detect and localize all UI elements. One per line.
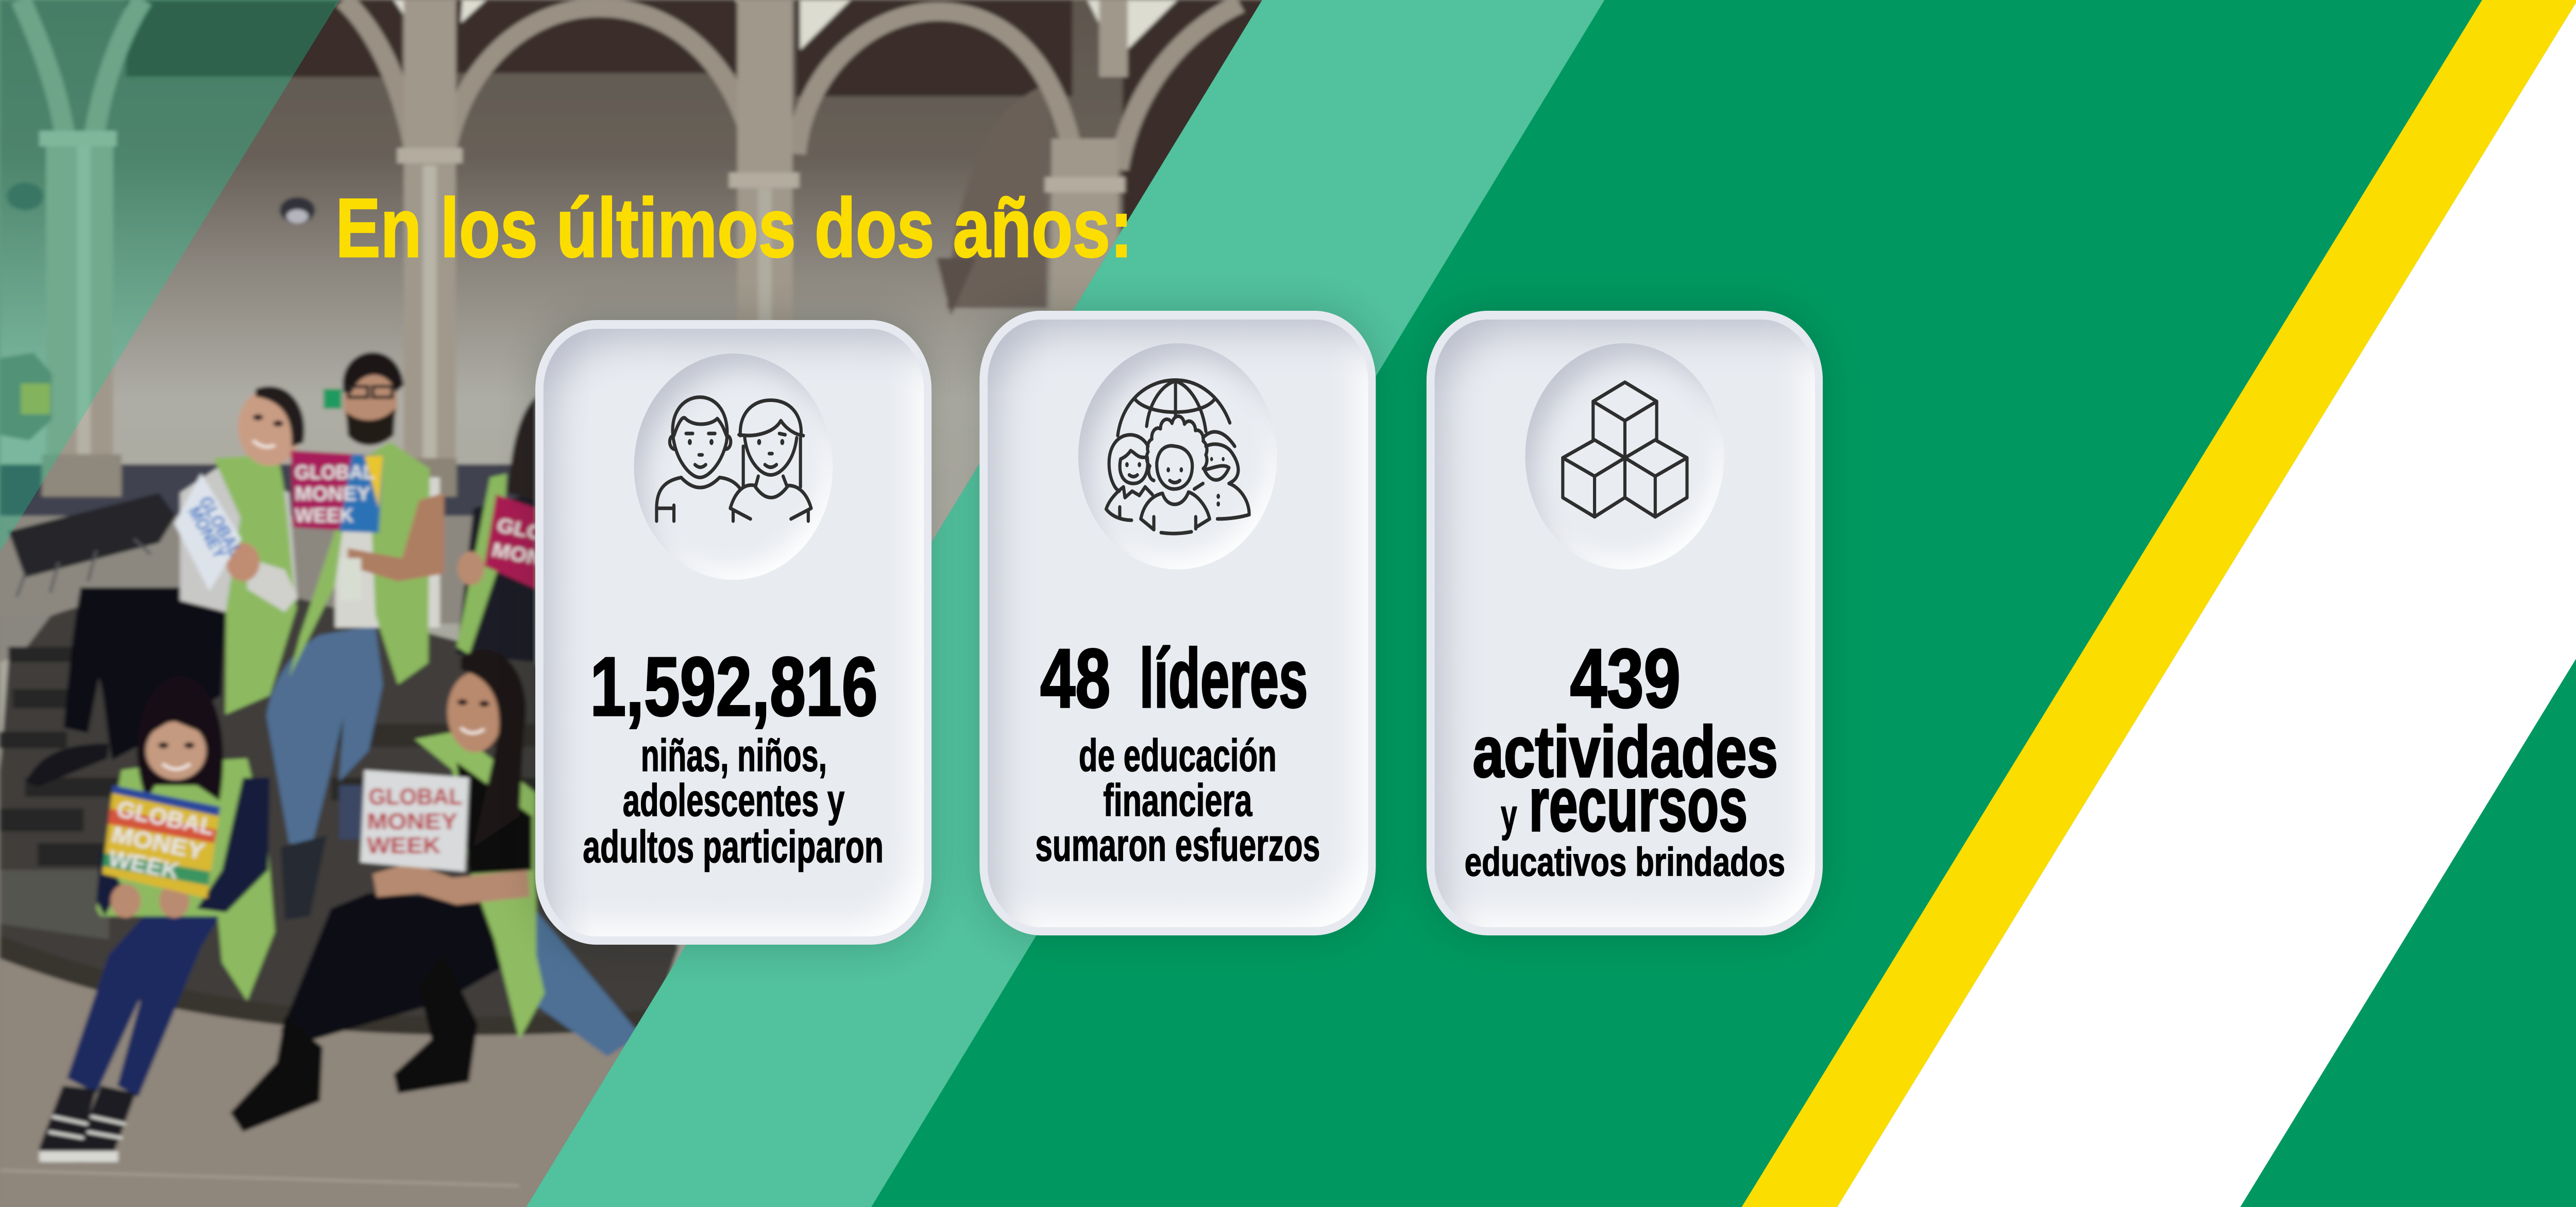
text block: card 1 description [583,730,884,872]
title: En los últimos dos años: [335,181,1132,275]
stone wainscot [0,464,536,518]
courtyard wall [0,0,1124,980]
light green diagonal band [526,0,1604,1207]
sign: magenta: GLOBAL [295,461,375,483]
sign: magenta [291,450,383,533]
courtyard floor [0,516,536,624]
text block: card 1 description: adolescentes y [623,775,844,826]
arches [21,0,1240,177]
alcove and pendant [947,85,1047,308]
stat number: 48 líderes: líderes [1140,632,1308,725]
icon: stacked cubes [1563,382,1687,517]
person: behind, right [456,396,546,662]
columns [46,0,1128,470]
spandrels [394,0,1177,53]
translucent green triangle over photo corner [0,0,340,551]
person: behind, right: GLO [495,513,546,545]
icon: boy and girl [656,397,811,521]
person: bottom-right girl [230,649,641,1132]
panel: card 3 activities and resources [1427,311,1823,935]
stat number: 439: 439 [1570,632,1681,725]
ground [0,955,653,1207]
panel: card 1 participants [535,320,931,945]
text block: card 3 description: recursos [1529,761,1748,847]
stat number: 48 líderes [1040,632,1308,725]
camera [280,197,315,223]
sign: blue: GLOBAL [195,493,246,559]
text block: card 2 description: de educación [1079,730,1277,781]
chairs [8,493,176,577]
text block: card 3 description: actividades [1473,712,1778,792]
person: top-left girl [26,387,304,787]
sign: striped: MONEY [109,822,207,864]
stat number: 1,592,816: 1,592,816 [590,640,878,733]
yellow diagonal stripe [1742,0,2576,1207]
stone stairs [0,592,679,1040]
person: bottom-left girl [39,676,275,1163]
text block: card 2 description [1035,730,1320,870]
sign: blue: MONEY [184,503,231,562]
sign: white: GLOBAL [369,784,463,810]
sign: white: MONEY [367,809,457,834]
dark ceiling [125,0,1262,231]
stat number: 48 líderes: 48 [1040,632,1110,725]
sign: magenta: WEEK [295,504,353,527]
icon: people in front of globe [1106,380,1249,533]
person: man with glasses [266,353,444,920]
octagon window [0,353,52,441]
sign: blue [174,474,246,591]
text block: card 1 description: niñas, niños, [641,730,827,781]
person: behind, right: MON [490,538,545,570]
sign: white: WEEK [367,832,441,858]
text block: card 3 description [1465,712,1785,884]
sign: striped [102,785,221,898]
text block: card 3 description: y [1501,790,1517,841]
photo: group of young people in a colonial courtyard [0,0,1262,1207]
white diagonal band [1837,0,2576,1207]
sign: white [360,770,469,871]
panel: card 2 leaders [979,311,1376,935]
sign: striped: WEEK [106,845,182,884]
text block: card 3 description: educativos brindados [1465,840,1785,884]
sign: striped: GLOBAL [114,796,217,840]
sign: magenta: MONEY [295,482,370,505]
text block: card 2 description: financiera [1103,775,1252,826]
